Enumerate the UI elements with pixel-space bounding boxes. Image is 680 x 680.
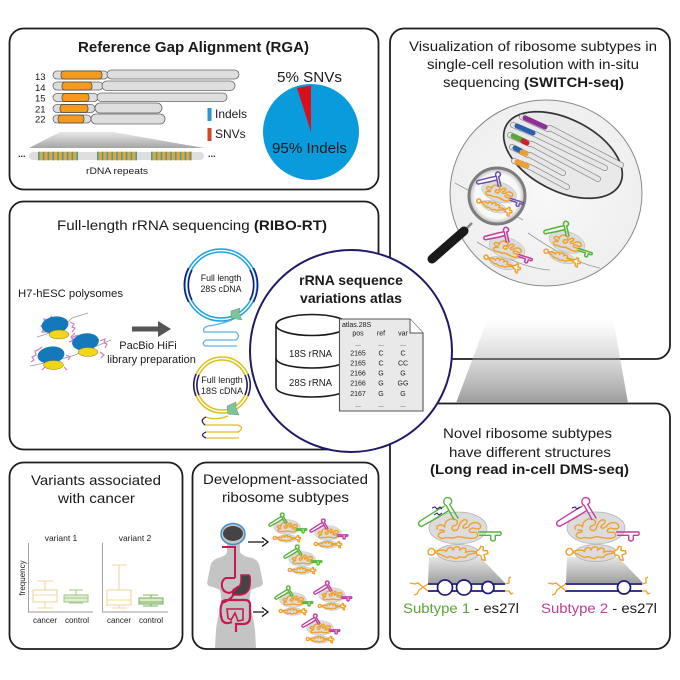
document: atlas table: ... <box>355 402 361 409</box>
document: atlas table: ... <box>400 341 406 348</box>
ribosome: green <box>536 216 599 271</box>
nucleus with chromosomes <box>490 94 636 216</box>
label: PacBio HiFi: library preparation <box>107 354 196 366</box>
panel: long read in-cell DMS-seq <box>390 404 670 649</box>
chromosome ideograms: 22 <box>35 114 46 126</box>
plasmid: 28S cDNA: Full length <box>201 273 241 283</box>
icon: database cylinder: 18S rRNA <box>289 348 332 360</box>
plasmid: 18S cDNA: 18S cDNA <box>201 386 243 396</box>
pie chart: 95% indels, 5% SNVs <box>263 69 359 180</box>
label: PacBio HiFi <box>107 340 196 366</box>
icon: human body with organs <box>207 524 263 648</box>
arrow: gut to ribosomes <box>253 608 268 616</box>
icon: database cylinder <box>276 314 348 397</box>
magnifying glass <box>432 167 530 259</box>
plasmid: 28S cDNA: 28S cDNA <box>200 284 242 294</box>
box plot: variant 1 and variant 2: cancer <box>33 616 57 625</box>
heading: SWITCH-seq: single-cell resolution with in-situ <box>427 56 639 72</box>
ribosome cluster: brain <box>269 513 348 574</box>
box plot: variant 1 and variant 2: variant 1 <box>45 533 78 543</box>
connector: zoom trapezoid <box>456 318 628 403</box>
heading: development: ribosome subtypes <box>222 489 349 505</box>
pie chart: 95% indels, 5% SNVs: 5% SNVs <box>277 69 342 86</box>
heading: SWITCH-seq: Visualization of ribosome subtypes in <box>409 38 657 54</box>
legend: indels and SNVs: SNVs <box>215 127 246 141</box>
heading: variants <box>31 472 161 506</box>
icon: polysomes <box>30 313 111 370</box>
heading: DMS-seq: (Long read in-cell DMS-seq) <box>430 461 629 477</box>
document: atlas table: G <box>378 391 384 398</box>
document: atlas table: 2166 <box>350 380 366 388</box>
label: subtype 1: Subtype 1 - es27l <box>403 600 519 616</box>
chromosome ideograms <box>35 70 239 126</box>
subtype 2 structure <box>541 498 657 616</box>
chromosome ideograms: 15 <box>35 94 46 104</box>
box plot: variant 1 and variant 2 <box>18 533 168 625</box>
document: atlas table: pos <box>352 330 364 338</box>
arrow: brain to ribosomes <box>248 538 268 546</box>
heading: DMS-seq: have different structures <box>449 444 611 460</box>
box plot: variant 1 and variant 2: control <box>139 616 163 625</box>
chromosome ideograms: 14 <box>35 83 46 94</box>
chromosome ideograms: 21 <box>35 104 46 116</box>
label: polysomes: H7-hESC polysomes <box>18 288 124 300</box>
subtype 1 structure <box>403 498 519 616</box>
document: atlas table: G <box>378 370 384 378</box>
document: atlas table: C <box>378 360 384 368</box>
heading: development <box>203 471 368 505</box>
document: atlas table: 2165 <box>350 360 366 368</box>
panel: SWITCH-seq <box>390 28 670 359</box>
document: atlas table: G <box>400 370 406 378</box>
heading: SWITCH-seq: sequencing (SWITCH-seq) <box>443 74 624 90</box>
heading: atlas: variations atlas <box>300 290 402 306</box>
cell with nucleus and ribosomes <box>432 94 642 286</box>
arrow: library preparation <box>132 321 171 337</box>
document: atlas table <box>340 319 423 411</box>
document: atlas table: C <box>400 350 406 358</box>
heading: RGA: Reference Gap Alignment (RGA) <box>78 40 309 56</box>
heading: variants: Variants associated <box>31 472 161 488</box>
pie chart: 95% indels, 5% SNVs: 95% Indels <box>272 140 347 157</box>
icon: database cylinder: 28S rRNA <box>289 377 332 389</box>
document: atlas table: C <box>378 350 384 358</box>
heading: atlas <box>299 272 403 306</box>
heading: atlas: rRNA sequence <box>299 272 403 288</box>
document: atlas table: CC <box>398 360 408 368</box>
box plot: variant 1 and variant 2: control <box>65 616 89 625</box>
central circle: rRNA sequence variations atlas <box>250 250 452 452</box>
plasmid: 18S cDNA: Full length <box>201 375 243 385</box>
panel: variants associated with cancer <box>10 462 182 649</box>
heading: SWITCH-seq <box>409 38 657 90</box>
plasmid: 18S cDNA <box>194 357 250 438</box>
panel: full-length rRNA sequencing <box>10 202 378 450</box>
document: atlas table: ... <box>400 402 406 409</box>
document: atlas table: ... <box>355 341 361 348</box>
ribosome cluster: gut <box>275 581 352 643</box>
document: atlas table: var <box>398 330 409 338</box>
ribosome: pink <box>476 222 539 277</box>
legend: indels and SNVs: Indels <box>215 107 247 121</box>
label: PacBio HiFi: PacBio HiFi <box>119 340 177 352</box>
rDNA repeats zoom <box>18 132 216 177</box>
panel: development-associated ribosome subtypes <box>192 462 378 649</box>
document: atlas table: 2165 <box>350 350 366 358</box>
box plot: variant 1 and variant 2: variant 2 <box>119 533 152 543</box>
heading: RIBO-RT: Full-length rRNA sequencing (RIBO-RT) <box>57 217 327 233</box>
heading: variants: with cancer <box>57 490 135 506</box>
document: atlas table: G <box>400 391 406 398</box>
rDNA repeats zoom: rDNA repeats <box>86 166 148 177</box>
plasmid: 28S cDNA <box>184 249 258 346</box>
document: atlas table: G <box>378 380 384 388</box>
heading: development: Development-associated <box>203 471 368 487</box>
heading: DMS-seq: Novel ribosome subtypes <box>443 425 612 441</box>
label: subtype 2: Subtype 2 - es27l <box>541 600 657 616</box>
document: atlas table: ... <box>378 402 384 409</box>
document: atlas table: 2167 <box>350 391 366 398</box>
legend: indels and SNVs <box>208 107 247 141</box>
rDNA repeats zoom: ... <box>18 149 26 159</box>
document: atlas table: 2166 <box>350 370 366 378</box>
box plot: variant 1 and variant 2: frequency <box>18 560 27 596</box>
rDNA repeats zoom: ... <box>208 149 216 159</box>
document: atlas table: ... <box>378 341 384 348</box>
panel: reference gap alignment <box>10 28 378 190</box>
document: atlas table: atlas.28S <box>342 322 372 329</box>
document: atlas table: ref <box>377 330 385 338</box>
chromosome ideograms: 13 <box>35 72 46 83</box>
document: atlas table: GG <box>398 380 408 388</box>
heading: DMS-seq <box>430 425 629 477</box>
box plot: variant 1 and variant 2: cancer <box>107 616 131 625</box>
